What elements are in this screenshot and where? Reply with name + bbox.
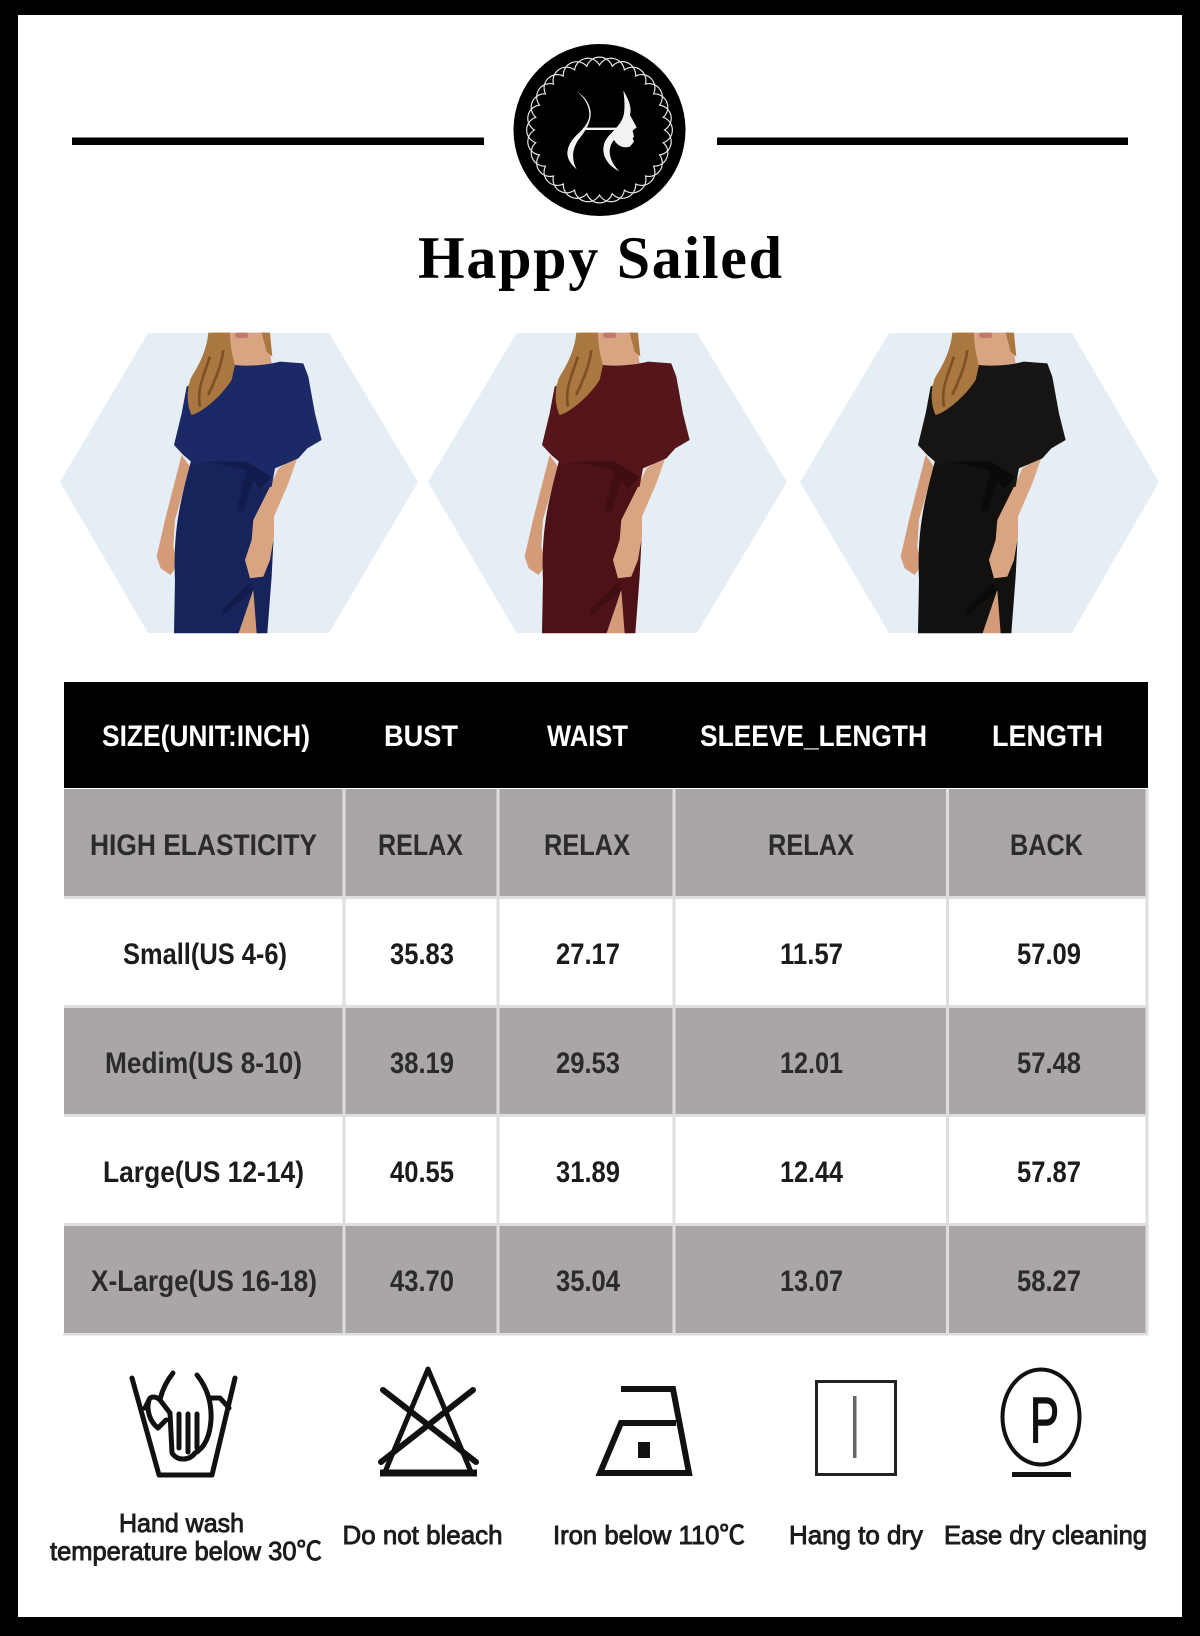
table row: large: 12.44 — [780, 1156, 843, 1189]
table row: medium: 38.19 — [390, 1047, 454, 1080]
table row: high elasticity: RELAX — [544, 829, 630, 862]
header rule right — [717, 138, 1128, 145]
table row: medium: 57.48 — [1017, 1047, 1081, 1080]
table row: x-large — [64, 1226, 1146, 1333]
table row: high elasticity: RELAX — [768, 829, 854, 862]
table header row: BUST — [384, 720, 458, 753]
table row: x-large: 13.07 — [780, 1265, 843, 1298]
table row: high elasticity: BACK — [1010, 829, 1083, 862]
table row: medium: Medim(US 8-10) — [105, 1047, 302, 1080]
label: dry cleaning: Ease dry cleaning — [944, 1520, 1147, 1550]
table row: medium: 29.53 — [556, 1047, 620, 1080]
table row: medium — [64, 1008, 1146, 1114]
icon: dry cleaning: P — [1030, 1384, 1059, 1456]
table row: x-large: 58.27 — [1017, 1265, 1081, 1298]
icon: hand wash — [132, 1373, 235, 1475]
table row: high elasticity: RELAX — [378, 829, 463, 862]
label: hang to dry: Hang to dry — [789, 1520, 923, 1550]
table row: small: Small(US 4-6) — [123, 938, 287, 971]
table row: large — [64, 1117, 1146, 1223]
header rule left — [72, 138, 484, 145]
label: hand wash: temperature below 30℃ — [50, 1536, 322, 1566]
label: do not bleach: Do not bleach — [342, 1520, 502, 1550]
label: hand wash: Hand wash — [119, 1508, 244, 1538]
panel: navy dress — [60, 333, 418, 633]
table row: large: 31.89 — [556, 1156, 620, 1189]
size table — [63, 682, 1148, 1336]
table row: small — [64, 899, 1146, 1005]
table row: large: Large(US 12-14) — [103, 1156, 304, 1189]
icon: iron — [600, 1389, 689, 1473]
table row: small: 35.83 — [390, 938, 454, 971]
table row: high elasticity — [64, 789, 1146, 896]
table header row — [64, 682, 1148, 788]
icon: do not bleach — [380, 1369, 477, 1473]
table row: x-large: 43.70 — [390, 1265, 454, 1298]
table row: large: 40.55 — [390, 1156, 454, 1189]
title: Happy Sailed — [418, 225, 782, 291]
icon: brand logo — [514, 44, 686, 216]
table header row: SIZE(UNIT:INCH) — [102, 720, 310, 753]
table row: small: 27.17 — [556, 938, 620, 971]
label: hand wash — [50, 1508, 322, 1566]
panel: black dress — [800, 333, 1159, 633]
table header row: WAIST — [547, 720, 628, 753]
table row: small: 57.09 — [1017, 938, 1081, 971]
table row: x-large: 35.04 — [556, 1265, 620, 1298]
table row: medium: 12.01 — [780, 1047, 843, 1080]
icon: dry cleaning — [1002, 1370, 1080, 1477]
table header row: LENGTH — [992, 720, 1103, 753]
table header row: SLEEVE_LENGTH — [700, 720, 927, 753]
table row: x-large: X-Large(US 16-18) — [91, 1265, 317, 1298]
table row: high elasticity: HIGH ELASTICITY — [90, 829, 317, 862]
icon: hang to dry — [816, 1382, 896, 1474]
table row: small: 11.57 — [780, 938, 843, 971]
label: iron: Iron below 110℃ — [553, 1520, 745, 1550]
table row: large: 57.87 — [1017, 1156, 1081, 1189]
panel: burgundy dress — [428, 333, 787, 633]
